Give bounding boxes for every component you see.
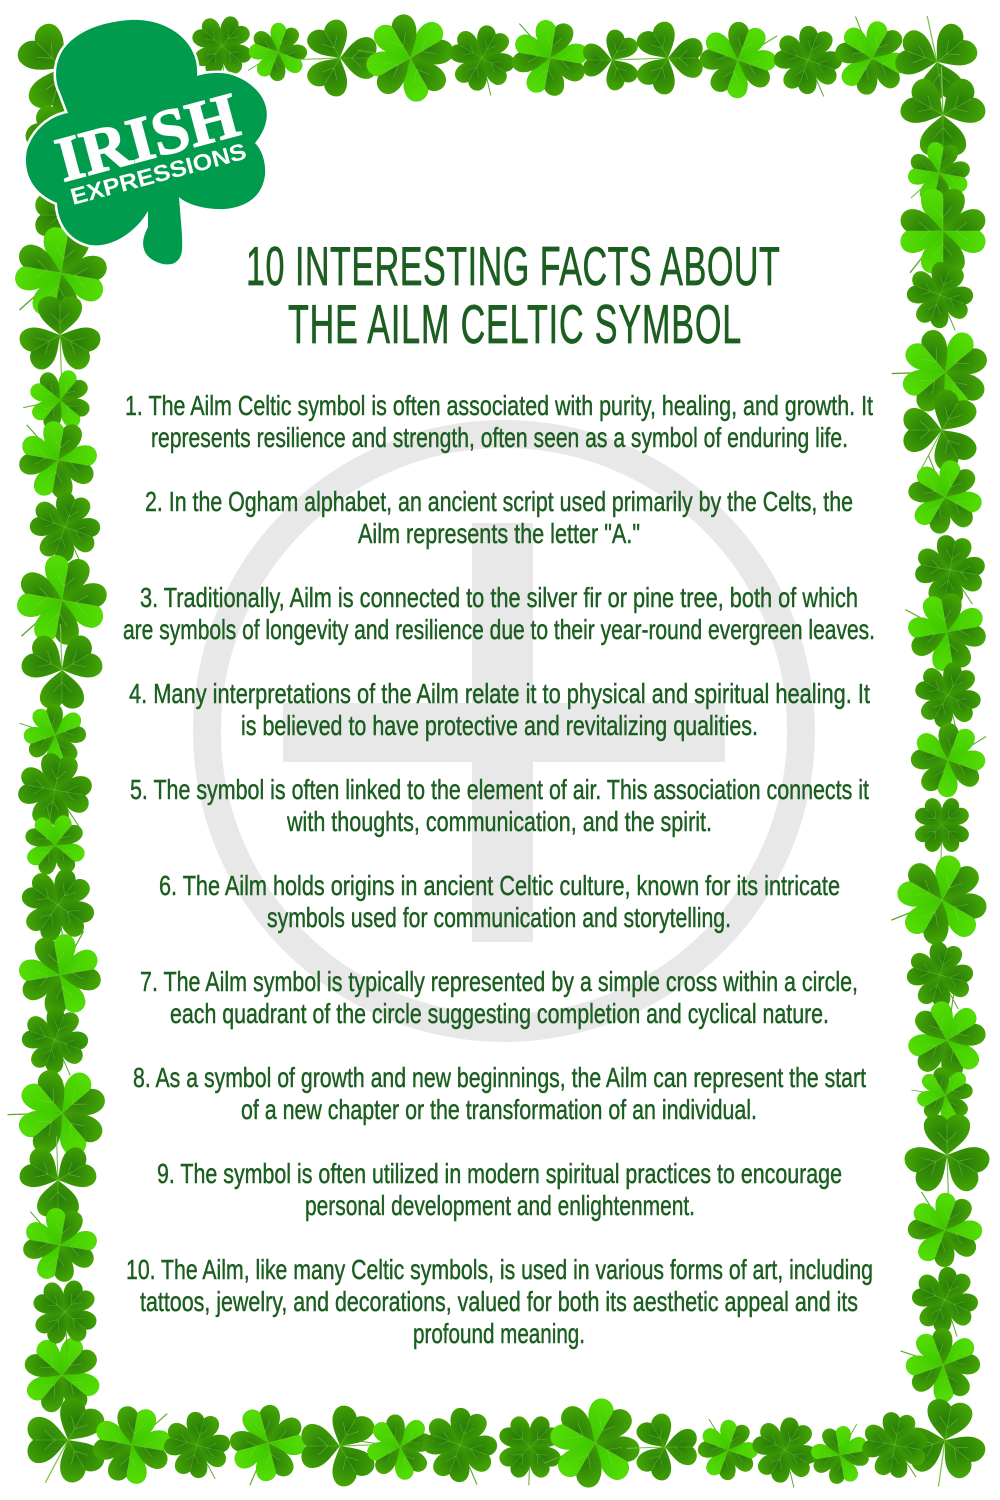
- logo: Irish Expressions shamrock: [26, 20, 267, 264]
- fact 6: [159, 870, 840, 933]
- fact 1: [125, 390, 873, 453]
- fact 2: Ailm represents the letter "A.": [358, 518, 640, 549]
- logo wordmark IRISH: IRISH: [48, 79, 246, 196]
- facts list: [123, 390, 875, 1349]
- clover border: right: [881, 67, 1000, 1494]
- fact 7: [140, 966, 858, 1029]
- clover border: left: [0, 1, 136, 1357]
- fact 10: profound meaning.: [413, 1318, 585, 1349]
- fact 4: is believed to have protective and revitalizing qualities.: [241, 710, 758, 741]
- fact 10: [126, 1254, 873, 1349]
- title: [246, 236, 780, 355]
- title: THE AILM CELTIC SYMBOL: [288, 294, 741, 355]
- fact 7: each quadrant of the circle suggesting completion and cyclical nature.: [170, 998, 829, 1029]
- fact 6: symbols used for communication and storytelling.: [267, 902, 731, 933]
- clover border: top: [180, 0, 989, 116]
- logo wordmark EXPRESSIONS: EXPRESSIONS: [68, 138, 249, 210]
- fact 5: [130, 774, 869, 837]
- fact 8: of a new chapter or the transformation of an individual.: [241, 1094, 757, 1125]
- fact 4: [129, 678, 870, 741]
- title: 10 INTERESTING FACTS ABOUT: [246, 236, 780, 297]
- watermark: Ailm symbol, cross within a circle: [207, 434, 801, 1028]
- fact 9: [157, 1158, 842, 1221]
- fact 6: 6. The Ailm holds origins in ancient Celtic culture, known for its intricate: [159, 870, 840, 901]
- fact 5: with thoughts, communication, and the spirit.: [286, 806, 712, 837]
- fact 2: [145, 486, 853, 549]
- fact 8: [133, 1062, 866, 1125]
- fact 9: personal development and enlightenment.: [305, 1190, 695, 1221]
- fact 3: [123, 582, 875, 645]
- logo shamrock shape: [26, 20, 267, 264]
- clover border: bottom: [3, 1322, 932, 1500]
